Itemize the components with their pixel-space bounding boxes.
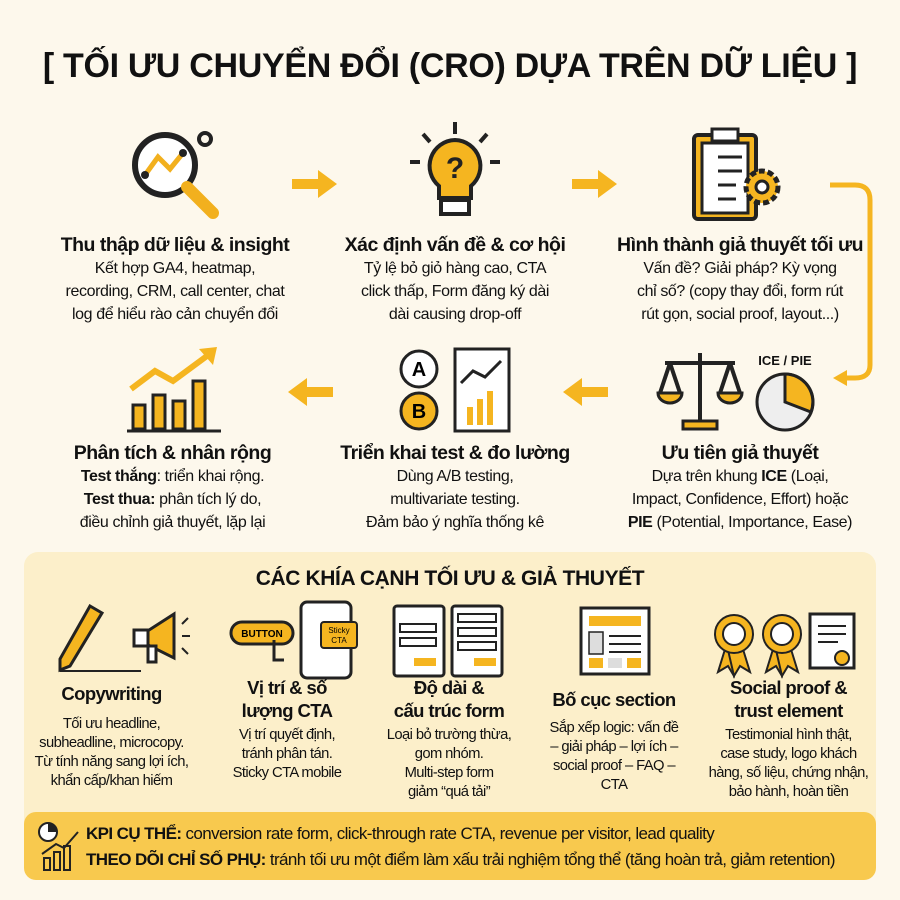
col1 text: Từ tính năng sang lợi ích, <box>35 754 188 770</box>
step 1 text: recording, CRM, call center, chat <box>66 283 284 300</box>
step 4 text: Impact, Confidence, Effort) hoặc <box>632 491 848 508</box>
icon: magnifier chart <box>132 131 219 219</box>
step 4 text: Dựa trên khung ICE (Loại, <box>652 468 828 485</box>
icon: pencil megaphone <box>58 604 190 672</box>
col1 text <box>34 683 188 789</box>
step 2 text: dài causing drop-off <box>389 306 521 323</box>
col2 text: Vị trí quyết định, <box>239 727 335 743</box>
col1 text: Copywriting <box>61 683 162 704</box>
col1 text: khẩn cấp/khan hiếm <box>51 773 172 789</box>
icon: button phone: BUTTON <box>241 629 283 640</box>
arrow: curved right <box>830 182 872 386</box>
icon: lightbulb: ? <box>446 152 464 185</box>
col3 text: Loại bỏ trường thừa, <box>387 727 511 743</box>
arrow 2 <box>572 170 617 198</box>
KPI text: THEO DÕI CHỈ SỐ PHỤ: tránh tối ưu một điểm làm xấu trải nghiệm tổng thể (tăng hoàn trả, giảm retention) <box>86 850 835 869</box>
col4 text: Bố cục section <box>552 689 676 710</box>
icon: forms <box>392 604 504 678</box>
col1 text: Tối ưu headline, <box>63 716 160 732</box>
icon: scales + pie <box>656 353 814 432</box>
step 6 text: Test thua: phân tích lý do, <box>84 491 261 508</box>
col2 text <box>233 677 342 781</box>
col5 text: Social proof & <box>730 677 847 698</box>
col5 text: bảo hành, hoàn tiền <box>729 784 848 800</box>
arrow 4 <box>288 378 333 406</box>
icon: button phone: Sticky <box>328 626 350 635</box>
step 2 text: Xác định vấn đề & cơ hội <box>345 234 565 256</box>
panel heading: CÁC KHÍA CẠNH TỐI ƯU & GIẢ THUYẾT <box>256 567 644 590</box>
step 2 text: click thấp, Form đăng ký dài <box>361 283 549 300</box>
step 5 text: multivariate testing. <box>390 491 520 508</box>
icon: lightbulb <box>410 122 500 216</box>
col3 text: cấu trúc form <box>394 700 504 721</box>
step 2 text <box>344 234 565 323</box>
col2 text: lượng CTA <box>242 700 332 721</box>
col3 text: Độ dài & <box>414 677 484 698</box>
col2 text: Vị trí & số <box>247 677 327 698</box>
step 4 text: Ưu tiên giả thuyết <box>662 442 818 464</box>
arrow 1 <box>292 170 337 198</box>
col3 text: giảm “quá tải” <box>408 784 490 800</box>
step 5 text <box>340 442 570 531</box>
icon: A/B test <box>400 348 510 432</box>
col5 text: case study, logo khách <box>720 746 857 762</box>
step 4 text <box>628 442 852 531</box>
step 6 text: Phân tích & nhân rộng <box>74 442 271 464</box>
col3 text: gom nhóm. <box>415 746 483 762</box>
icon: scales + pie: ICE / PIE <box>758 353 812 368</box>
icon: A/B test: A <box>412 359 426 381</box>
col5 text <box>709 677 868 800</box>
step 3 text: Hình thành giả thuyết tối ưu <box>617 234 863 256</box>
step 3 text: Vấn đề? Giải pháp? Kỳ vọng <box>643 260 837 277</box>
step 6 text: Test thắng: triển khai rộng. <box>81 468 264 485</box>
icon: button phone: CTA <box>331 636 347 645</box>
title: [ TỐI ƯU CHUYỂN ĐỔI (CRO) DỰA TRÊN DỮ LIỆU ] <box>43 47 857 85</box>
step 3 text <box>617 234 863 323</box>
col3 text <box>387 677 511 800</box>
step 1 text <box>60 234 290 323</box>
col5 text: Testimonial hình thật, <box>725 727 852 743</box>
step 1 text: Kết hợp GA4, heatmap, <box>95 260 255 277</box>
col4 text: CTA <box>601 777 627 793</box>
col5 text: hàng, số liệu, chứng nhận, <box>709 765 868 781</box>
col4 text: Sắp xếp logic: vấn đề <box>550 720 678 736</box>
panel: aspects <box>24 552 876 880</box>
step 6 text: điều chỉnh giả thuyết, lặp lại <box>80 514 265 531</box>
step 5 text: Triển khai test & đo lường <box>340 442 570 464</box>
col2 text: Sticky CTA mobile <box>233 765 341 781</box>
step 2 text: Tỷ lệ bỏ giỏ hàng cao, CTA <box>364 260 546 277</box>
icon: A/B test: B <box>412 401 426 423</box>
step 4 text: PIE (Potential, Importance, Ease) <box>628 514 852 531</box>
col3 text: Multi-step form <box>405 765 493 781</box>
step 1 text: Thu thập dữ liệu & insight <box>61 234 289 256</box>
col4 text <box>550 689 678 793</box>
arrow 3 <box>563 378 608 406</box>
col5 text: trust element <box>734 700 843 721</box>
KPI text: KPI CỤ THỂ: conversion rate form, click-through rate CTA, revenue per visitor, lead quality <box>86 824 714 843</box>
col2 text: tránh phân tán. <box>242 746 332 762</box>
icon: button phone <box>230 600 358 680</box>
step 3 text: rút gọn, social proof, layout...) <box>641 306 839 323</box>
KPI bar <box>24 812 876 880</box>
icon: clipboard gear <box>692 128 780 221</box>
icon: layout <box>580 606 650 676</box>
icon: growth bars <box>127 347 221 432</box>
step 5 text: Dùng A/B testing, <box>397 468 513 485</box>
step 5 text: Đảm bảo ý nghĩa thống kê <box>366 514 544 531</box>
icon: kpi chart <box>38 822 79 871</box>
icon: badges <box>714 612 856 678</box>
step 6 text <box>74 442 271 531</box>
step 3 text: chỉ số? (copy thay đổi, form rút <box>637 283 843 300</box>
col4 text: social proof – FAQ – <box>553 758 675 774</box>
col1 text: subheadline, microcopy. <box>39 735 184 751</box>
KPI text <box>86 824 835 869</box>
step 1 text: log để hiểu rào cản chuyển đổi <box>72 306 278 323</box>
col4 text: – giải pháp – lợi ích – <box>550 739 678 755</box>
